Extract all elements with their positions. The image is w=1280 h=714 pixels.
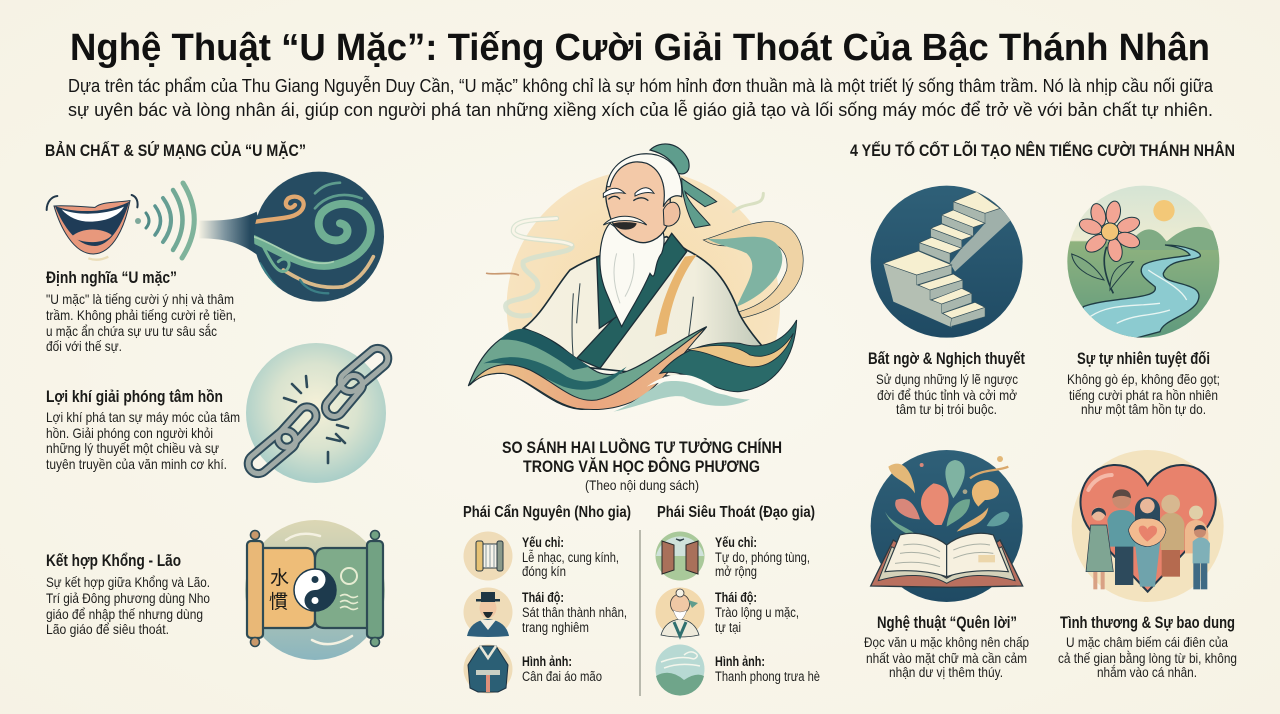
block: definition: "U mặc" là tiếng cười ý nhị và thâm [46,291,234,307]
icon: bamboo scroll [464,532,512,580]
robe [523,237,768,377]
Confucian text rows: Thái độ: [522,590,564,605]
panel: nature and mission of U mac [45,141,392,660]
block: liberating weapon: Lợi khí phá tan sự máy móc của tâm [46,409,240,425]
block: art of forgetting words: Nghệ thuật “Quên lời” [877,614,1017,632]
comparison heading: TRONG VĂN HỌC ĐÔNG PHƯƠNG [523,457,760,476]
block: Confucius and Lao combination: Kết hợp Khổng - Lão [46,552,181,570]
icon: summer breeze [656,644,704,696]
block: liberating weapon: hồn. Giải phóng con người khỏi [46,425,213,441]
block: liberating weapon: những lý thuyết một chiều và sự [46,440,219,456]
column heading: Confucian: Phái Cẩn Nguyên (Nho gia) [463,504,631,521]
icon: open book with speech shapes [871,450,1023,602]
block: definition [46,269,236,354]
block: love and tolerance: cả thế gian bằng lòng từ bi, không [1058,650,1237,666]
Taoist text rows: mở rộng [715,564,757,579]
Taoist text rows: Trào lộng u mặc, [715,605,799,620]
icon: flower and stream [1067,186,1220,343]
hair [607,154,682,207]
block: love and tolerance [1058,614,1237,680]
icon: scholar official [464,588,512,637]
block: absolute naturalness [1067,350,1220,417]
icon: sound waves [135,183,194,258]
teal collar [577,233,687,368]
right flowing ribbon [700,222,803,323]
elder man figure [1160,495,1184,577]
block: Confucius and Lao combination: Trí giả Đông phương dùng Nho [46,590,210,606]
block: art of forgetting words [864,614,1029,680]
Confucian text rows: Hình ảnh: [522,654,572,669]
block: Confucius and Lao combination: Sự kết hợp giữa Khổng và Lão. [46,574,210,590]
block: surprise and paradox: đời để thúc tỉnh và cởi mở [877,387,1017,403]
block: surprise and paradox: Bất ngờ & Nghịch thuyết [868,350,1025,368]
left panel heading: BẢN CHẤT & SỨ MẠNG CỦA “U MẶC” [45,141,306,160]
Confucian text rows: Cân đai áo mão [522,669,602,684]
block: absolute naturalness: tiếng cười phát ra hồn nhiên [1069,387,1218,403]
title: Nghệ Thuật “U Mặc”: Tiếng Cười Giải Thoát Của Bậc Thánh Nhân [70,27,1210,69]
sun disc [506,174,780,345]
Confucian text rows: trang nghiêm [522,620,589,635]
Confucian text rows: Lễ nhạc, cung kính, [522,550,619,565]
block: definition: trầm. Không phải tiếng cười rẻ tiền, [46,307,236,323]
older adult figure [1185,506,1208,553]
block: love and tolerance: U mặc châm biếm cái điên của [1066,634,1228,650]
beard [600,217,664,327]
block: definition: u mặc ẩn chứa sự ưu tư sâu sắc [46,323,217,339]
intro paragraph: sự uyên bác và lòng nhân ái, giúp con người phá tan những xiềng xích của lễ giáo giả tạo và lối sống máy móc để trở về với bản chất tự nhiên. [68,99,1213,120]
Taoist text rows: Yếu chỉ: [715,535,757,550]
icon: heart and family [1072,450,1224,602]
block: art of forgetting words: nhất vào mặt chữ mà cần cảm [866,650,1027,666]
block: definition: Định nghĩa “U mặc” [46,269,177,287]
icon: scroll with yin-yang [245,520,385,660]
block: definition: đối với thế sự. [46,338,122,354]
mouth and moustache [613,222,637,230]
comparison heading [502,438,782,493]
icon: scroll with yin-yang: 水 [270,567,289,589]
Taoist text rows: tự tại [715,620,741,635]
icon: broken chain [244,343,392,483]
block: liberating weapon: Lợi khí giải phóng tâm hồn [46,388,223,406]
Taoist text rows [715,535,820,684]
Confucian text rows: Yếu chỉ: [522,535,564,550]
block: surprise and paradox: Sử dụng những lý lẽ ngược [876,371,1018,387]
block: absolute naturalness: như một tâm hồn tự do. [1081,401,1206,417]
icon: laughing mouth [47,195,138,260]
block: liberating weapon [46,388,240,472]
icon: laughing hermit [656,588,704,637]
Taoist text rows: Hình ảnh: [715,654,765,669]
icon: staircase [871,186,1023,338]
Confucian text rows: Sát thân thành nhân, [522,605,627,620]
man figure [1107,489,1136,585]
comparison heading: SO SÁNH HAI LUỒNG TƯ TƯỞNG CHÍNH [502,438,782,457]
block: Confucius and Lao combination [46,552,210,637]
Confucian text rows: đóng kín [522,564,566,579]
block: Confucius and Lao combination: giáo để nhập thế nhưng dùng [46,606,203,622]
block: Confucius and Lao combination: Lão giáo để siêu thoát. [46,621,169,637]
lower ribbons [468,327,707,409]
block: absolute naturalness: Không gò ép, không đẽo gọt; [1067,371,1220,387]
Taoist text rows: Thái độ: [715,590,757,605]
block: liberating weapon: tuyên truyền của văn minh cơ khí. [46,456,227,472]
column heading: Taoist: Phái Siêu Thoát (Đạo gia) [657,504,815,521]
block: absolute naturalness: Sự tự nhiên tuyệt đối [1077,350,1210,368]
boy figure [1193,525,1210,589]
block: love and tolerance: nhắm vào cá nhân. [1097,664,1197,680]
panel: comparison of two schools [463,438,820,696]
icon: formal robe [464,644,512,694]
illustration: laughing sage [468,144,803,443]
block: art of forgetting words: Đọc văn u mặc không nên chấp [864,634,1029,650]
bottom pale wave [613,378,750,412]
panel: four core elements [850,140,1237,680]
woman figure [1128,497,1166,587]
icon: open doors [656,532,704,580]
head [606,161,670,243]
hair bun and ribbon [650,144,689,174]
smoke wisps [487,193,763,316]
comparison heading: (Theo nội dung sách) [585,477,699,493]
block: art of forgetting words: nhận dư vị thêm thúy. [889,664,1003,680]
Confucian text rows [522,535,627,684]
girl figure [1086,507,1113,589]
icon: swirl with tail [199,172,384,302]
Taoist text rows: Tự do, phóng tùng, [715,550,810,565]
block: surprise and paradox [868,350,1025,417]
intro paragraph [68,75,1214,120]
block: love and tolerance: Tình thương & Sự bao dung [1060,614,1235,632]
book [871,540,1023,587]
Taoist text rows: Thanh phong trưa hè [715,669,820,684]
block: surprise and paradox: tâm tư bị trói buộc. [896,401,997,417]
icon: scroll with yin-yang: 慣 [269,591,288,613]
ochre sash [655,255,697,337]
